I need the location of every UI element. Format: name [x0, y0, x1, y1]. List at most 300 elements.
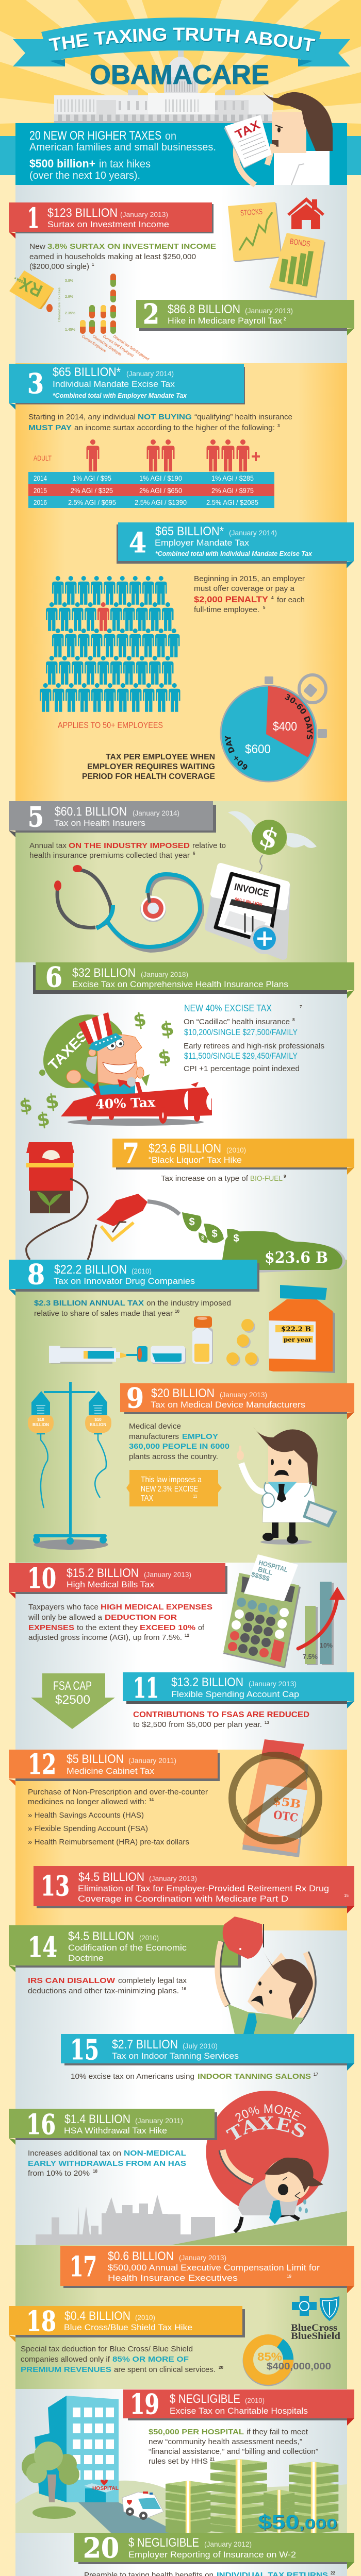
illustration: uncle sam in car: $ [18, 1094, 34, 1117]
chart: pill bar chart: ObamaCare Self-Employed [112, 334, 150, 362]
ribbon: tax 11: $13.2 BILLION [171, 1675, 243, 1689]
ribbon: tax 13: 13 [41, 1870, 70, 1902]
text block: tax 3: MUST PAY [28, 423, 72, 432]
text block: tax 5: relative to [192, 841, 226, 850]
icon: FSA cap arrow: $2500 [55, 1693, 90, 1707]
icon: RX bottle: RX [17, 273, 45, 301]
table: mandate penalties: 2014 [34, 474, 47, 482]
text block: tax 3 [28, 413, 292, 432]
icon: drug bottle: $22.2 B [281, 1326, 311, 1333]
table: mandate penalties: 1% AGI / $95 [73, 474, 111, 482]
text block: tax 7: Tax increase on a type of [161, 1174, 249, 1183]
text block: tax 10: DEDUCTION FOR [105, 1613, 177, 1622]
icon: FSA cap arrow: FSA CAP [53, 1679, 92, 1693]
text block: tax 15: INDOOR TANNING SALONS [198, 2072, 311, 2081]
ribbon: tax 6: Excise Tax on Comprehensive Health Insurance Plans [72, 979, 288, 989]
text block: tax 10: of [198, 1623, 205, 1632]
ribbon: tax 20: $ NEGLIGIBLE [128, 2536, 199, 2550]
illustration: money stacks: ,000 [299, 2516, 337, 2532]
illustration: IV stand [28, 1382, 111, 1550]
icon: drug bottle: per year [284, 1336, 311, 1343]
ribbon: tax 13: $4.5 BILLION [78, 1870, 144, 1884]
illustration: man reading tax form [224, 91, 333, 185]
illustration: uncle sam in car: 40% Tax [95, 1095, 156, 1112]
icon row: adults: ADULT [34, 454, 52, 462]
ribbon: tax 1: $123 BILLION [47, 206, 118, 220]
callout: excise tax [126, 1470, 222, 1506]
icon: flying dollar: $ [255, 820, 283, 856]
callout: excise tax: 11 [193, 1494, 198, 1499]
text block: tax 9: plants across the country. [129, 1452, 218, 1461]
illustration: stethoscope [54, 865, 202, 951]
text block: tax 18: are spent on clinical services. [114, 2365, 216, 2374]
text block: tax 8 [34, 1299, 231, 1318]
illustration: syringe and vials [49, 1316, 259, 1366]
table: mandate penalties: 2015 [34, 487, 47, 495]
text block: tax 10 [28, 1603, 212, 1642]
logo: BlueCross BlueShield: BlueCross [291, 2323, 337, 2333]
text block: tax 15 [71, 2072, 318, 2081]
ribbon: tax 14: 14 [28, 1931, 57, 1963]
ribbon: tax 9: Tax on Medical Device Manufacturers [151, 1400, 305, 1410]
ribbon: tax 15: (July 2010) [183, 2042, 218, 2050]
text block: tax 4 [194, 574, 305, 614]
ribbon: tax 15: Tax on Indoor Tanning Services [112, 2051, 239, 2061]
text block: tax 5: health insurance premiums collected that year [29, 851, 190, 860]
text block: tax 9: Medical device [129, 1422, 181, 1431]
ribbon: tax 18: Blue Cross/Blue Shield Tax Hike [64, 2323, 192, 2332]
ribbon: tax 2 [136, 298, 354, 335]
ribbon: tax 14: $4.5 BILLION [68, 1929, 134, 1943]
ribbon: tax 4: *Combined total with Individual Mandate Excise Tax [155, 550, 313, 557]
table: mandate penalties: 2.5% AGI / $695 [68, 499, 116, 506]
text block: tax 10: adjusted gross income (AGI), up from 7.5%. [28, 1633, 182, 1642]
ribbon: tax 12: 12 [28, 1749, 56, 1781]
text block: tax 3: Starting in 2014, any individual [28, 413, 136, 421]
text block: tax 3: “qualifying” health insurance [194, 413, 292, 421]
text block: tax 7: BIO-FUEL [250, 1174, 283, 1183]
ribbon: tax 4: $65 BILLION* [155, 524, 224, 538]
text block: tax 12: » Flexible Spending Account (FSA) [28, 1824, 148, 1833]
ribbon: tax 2: (January 2013) [245, 307, 293, 315]
text block: tax 1 [29, 242, 216, 271]
ribbon: tax 18: 18 [26, 2306, 56, 2337]
chart: pill bar chart: 3.8% [65, 279, 74, 283]
text block: tax 16: NON-MEDICAL [124, 2149, 186, 2158]
icon: money pile: $ [201, 1235, 204, 1241]
text block: tax 6: On “Cadillac” health insurance [184, 1018, 290, 1026]
icon label: TAX: TAX [233, 118, 262, 142]
ribbon: tax 3: *Combined total with Employer Mandate Tax [53, 392, 187, 399]
ribbon: tax 17: $500,000 Annual Executive Compensation Limit for [108, 2263, 320, 2273]
ribbon: tax 16: (January 2011) [135, 2116, 183, 2125]
ribbon: tax 15: 15 [70, 2034, 99, 2066]
chart: pill bar chart [58, 274, 150, 362]
text block: tax 5 [29, 841, 226, 860]
icon: money pile: $ [211, 1228, 218, 1240]
panel: intro: 20 NEW OR HIGHER TAXES [29, 129, 161, 143]
ribbon: tax 11: 11 [133, 1672, 159, 1704]
text block: tax 1: 3.8% SURTAX ON INVESTMENT INCOME [47, 242, 216, 251]
chart: pill bar chart: 1.45% [65, 328, 76, 332]
text block: tax 9: 360,000 PEOPLE IN 6000 [129, 1442, 229, 1451]
text block: tax 7: 9 [284, 1174, 286, 1179]
text block: tax 8: $2.3 BILLION ANNUAL TAX [34, 1299, 144, 1308]
label: waiting period tax [82, 753, 215, 781]
ribbon: tax 5 [9, 801, 216, 837]
illustration: man pushing ball uphill [222, 2150, 323, 2232]
text block: tax 9: EMPLOY [182, 1432, 218, 1441]
text block: tax 18: PREMIUM REVENUES [21, 2365, 111, 2374]
text block: tax 19 [149, 2428, 318, 2466]
text block: tax 12 [28, 1788, 208, 1846]
icon: crossed-out OTC bottle: OTC [272, 1808, 299, 1825]
illustration: calculator with hospital bill: BILL [257, 1565, 273, 1577]
icon: crossed-out OTC bottle: $5B [272, 1794, 302, 1811]
ribbon: tax 17: 19 [287, 2274, 291, 2279]
icon: invoice tag [209, 867, 286, 956]
ribbon: tax 6 [33, 961, 354, 998]
ribbon: tax 10: High Medical Bills Tax [67, 1580, 155, 1589]
text block: tax 12: 14 [149, 1798, 154, 1802]
icon: money pile: $23.6 B [265, 1249, 328, 1267]
table: mandate penalties: 2% AGI / $975 [211, 487, 254, 495]
ribbon: tax 7 [112, 1138, 354, 1175]
label: waiting period tax: EMPLOYER REQUIRES WAITING [87, 762, 215, 771]
ribbon: tax 6: (January 2018) [141, 970, 188, 978]
text block: tax 11: 13 [265, 1720, 269, 1725]
text block: tax 4: 5 [263, 605, 266, 610]
illustration: uncle sam in car: $ [159, 1016, 175, 1041]
ribbon: tax 2: 2 [143, 298, 159, 330]
chart: 85 percent donut [243, 2336, 331, 2385]
callout: excise tax: NEW 2.3% EXCISE [141, 1485, 198, 1494]
illustration: calculator with hospital bill [223, 1554, 301, 1668]
icon: bonds chart [269, 233, 325, 298]
label: waiting period tax: TAX PER EMPLOYEE WHEN [106, 753, 215, 761]
ribbon: tax 4: (January 2014) [229, 529, 277, 537]
text block: tax 16: 18 [93, 2169, 97, 2174]
text block: tax 8: 10 [175, 1309, 179, 1314]
text block: tax 16: Increases additional tax on [28, 2149, 121, 2158]
ribbon: tax 6: $32 BILLION [72, 966, 136, 980]
text block: tax 3: 3 [277, 423, 280, 428]
chart: pill bar chart: ObamaCare Tax Hike [58, 287, 61, 322]
ribbon: tax 8: Tax on Innovator Drug Companies [54, 1276, 195, 1286]
title line 1: THE TAXING TRUTH ABOUT [48, 28, 316, 53]
text block: tax 16: EARLY WITHDRAWALS FROM AN HAS [28, 2159, 186, 2168]
ribbon: tax 17: 17 [70, 2251, 97, 2283]
chart: stopwatch waiting period: $600 [245, 742, 271, 756]
chart: deduction threshold bars: 7.5% [303, 1653, 318, 1660]
text block: tax 6: $11,500/SINGLE $29,450/FAMILY [184, 1051, 298, 1061]
icon: money pile: $ [233, 1233, 239, 1244]
callout: excise tax: This law imposes a [141, 1476, 202, 1484]
ribbon: tax 12 [9, 1749, 220, 1786]
text block: tax 14: deductions and other tax-minimizing plans. [28, 1987, 179, 1995]
ribbon: tax 3: (January 2014) [126, 369, 174, 378]
text block: tax 3: an income surtax according to the higher of the following: [74, 423, 275, 432]
chart: deduction threshold bars [298, 1582, 345, 1665]
ribbon: tax 4: Employer Mandate Tax [155, 538, 250, 548]
text block: tax 1: 1 [92, 262, 94, 267]
text block: tax 8: on the industry imposed [146, 1299, 231, 1308]
ribbon: tax 15 [61, 2034, 354, 2071]
chart: pill bar chart: ObamaCare Employee [92, 334, 123, 357]
text block: tax 10: EXCEED 10% [140, 1623, 195, 1632]
icon: flying dollar [228, 811, 317, 872]
chart: stopwatch waiting period: 60+ DAYS [225, 736, 248, 770]
ribbon: tax 17: Health Insurance Executives [108, 2273, 238, 2283]
ribbon: tax 18: (2010) [135, 2313, 155, 2321]
ribbon: tax 7: $23.6 BILLION [149, 1142, 221, 1156]
ribbon: tax 12: Medicine Cabinet Tax [67, 1766, 155, 1776]
text block: tax 1: ($200,000 single) [29, 262, 89, 271]
text block: tax 16: from 10% to 20% [28, 2169, 90, 2178]
ribbon: tax 19: (2010) [245, 2396, 265, 2404]
illustration: uncle sam in car [18, 1009, 212, 1131]
illustration: uncle sam in car: $ [44, 1089, 60, 1114]
ribbon: tax 8: (2010) [132, 1267, 152, 1275]
ribbon: tax 5: $60.1 BILLION [55, 805, 127, 819]
illustration: doctor [237, 1427, 337, 1545]
icon: FSA cap arrow [31, 1673, 115, 1729]
illustration: uncle sam in car: TAXES [45, 1027, 91, 1073]
chart: pill bar chart: Current Employee [81, 334, 107, 353]
text block: tax 10: to the extent they [77, 1623, 138, 1632]
logo: BlueCross BlueShield [291, 2296, 340, 2342]
ribbon: tax 1: (January 2013) [120, 210, 168, 218]
ribbon: tax 16: $1.4 BILLION [64, 2112, 130, 2126]
text block: tax 15: 10% excise tax on Americans using [71, 2072, 194, 2081]
ribbon: tax 3 [9, 364, 245, 410]
label: waiting period tax: PERIOD FOR HEALTH COVERAGE [82, 772, 215, 781]
chart: pill bar chart: Current Self-Employed [102, 334, 135, 358]
ribbon: tax 17 [60, 2246, 354, 2293]
text block: tax 11: to $2,500 from $5,000 per plan year. [133, 1720, 262, 1729]
text block: tax 19: rules set by HHS [149, 2457, 208, 2466]
panel: intro: (over the next 10 years). [29, 170, 140, 181]
panel: intro: $500 billion+ [29, 157, 95, 170]
text block: tax 14: completely legal tax [118, 1976, 187, 1985]
text block: tax 20: 22 [331, 2571, 335, 2575]
illustration: skyline and hill [36, 2195, 347, 2245]
text block: tax 12: » Health Reimubrsement (HRA) pre-tax dollars [28, 1838, 189, 1846]
logo: BlueCross BlueShield: BlueShield [291, 2331, 340, 2342]
text block: tax 12: Purchase of Non-Prescription and over-the-counter [28, 1788, 208, 1797]
icon: money pile: $ [189, 1216, 195, 1228]
ribbon: tax 1 [9, 202, 214, 239]
ribbon: tax 14: Codification of the Economic [68, 1943, 187, 1953]
ribbon: tax 7: (2010) [226, 1146, 246, 1154]
illustration: man shaking piggy bank [217, 1917, 314, 2034]
icon grid: 50+ employees [40, 576, 180, 712]
illustration: IV stand: $10 [94, 1417, 102, 1422]
text block: tax 4: 4 [271, 596, 274, 600]
ribbon: tax 13: Coverage in Coordination with Medicare Part D [78, 1894, 288, 1904]
chart: stopwatch waiting period [220, 673, 327, 782]
ribbon: tax 8: 8 [27, 1259, 45, 1291]
illustration: 20% more taxes ball [206, 2091, 329, 2206]
text block: tax 10: Taxpayers who face [28, 1603, 99, 1612]
ribbon: tax 13: Elimination of Tax for Employer-Provided Retirement Rx Drug [78, 1884, 329, 1893]
text block: tax 4: for each [277, 596, 305, 604]
text block: tax 14: 16 [182, 1987, 186, 1991]
label: applies to: APPLIES TO 50+ EMPLOYEES [58, 720, 163, 730]
ribbon: tax 20: (January 2012) [204, 2540, 252, 2548]
text block: tax 15: 17 [314, 2072, 318, 2077]
text block: tax 5: Annual tax [29, 841, 67, 850]
icon: money pile [182, 1212, 346, 1273]
text block: tax 16 [28, 2149, 186, 2178]
icon: stocks chart: STOCKS [240, 207, 263, 217]
chart: 85 percent donut: $400,000,000 [267, 2361, 331, 2371]
ribbon: tax 15: $2.7 BILLION [112, 2038, 178, 2052]
icon: drug bottle [269, 1285, 335, 1373]
ribbon: tax 5: (January 2014) [133, 809, 179, 817]
illustration: IV stand: $10 [37, 1417, 44, 1422]
text block: tax 7 [161, 1174, 286, 1183]
text block: tax 6: $10,200/SINGLE $27,500/FAMILY [184, 1027, 298, 1037]
text block: tax 18: 85% OR MORE OF [112, 2355, 189, 2364]
ribbon: tax 9: $20 BILLION [151, 1386, 215, 1400]
ribbon: tax 17: (January 2013) [179, 2253, 226, 2262]
text block: tax 9 [129, 1422, 229, 1461]
ribbon: tax 3: $65 BILLION* [53, 365, 121, 379]
ribbon: tax 2: Hike in Medicare Payroll Tax [168, 316, 283, 326]
text block: tax 12: medicines no longer allowed with: [28, 1798, 146, 1806]
ribbon: tax 18: $0.4 BILLION [64, 2309, 130, 2323]
text block: tax 4: $2,000 PENALTY [194, 595, 269, 604]
ribbon: tax 5: 5 [28, 801, 44, 833]
panel: intro [15, 91, 347, 185]
table: mandate penalties: 2.5% AGI / $1390 [135, 499, 187, 506]
ribbon: tax 11 [123, 1672, 354, 1708]
ribbon: tax 14 [9, 1925, 241, 1972]
icon: stocks chart [228, 202, 282, 262]
icon: RX bottle: 200K+ [13, 276, 26, 285]
ribbon: tax 19: 19 [130, 2388, 159, 2420]
text block: tax 19: new “community health assessment needs,” [149, 2437, 302, 2446]
illustration: biofuel pump [26, 1142, 179, 1260]
table: mandate penalties: 2% AGI / $650 [139, 487, 182, 495]
chart: pill bar chart: 2.9% [65, 295, 74, 299]
callout: excise tax: TAX [141, 1494, 153, 1503]
illustration: money stacks [166, 2459, 338, 2535]
ribbon: tax 17: $0.6 BILLION [108, 2249, 174, 2263]
ribbon: tax 9 [120, 1382, 354, 1419]
ribbon: tax 4 [117, 522, 354, 568]
text block: tax 4: must offer coverage or pay a [194, 584, 295, 593]
illustration: uncle sam in car: $ [132, 1009, 147, 1032]
text block: tax 10: HIGH MEDICAL EXPENSES [101, 1603, 212, 1612]
illustration: IV stand: BILLION [90, 1422, 106, 1427]
tax 1 section [9, 197, 325, 362]
ribbon: tax 12: $5 BILLION [67, 1752, 124, 1766]
text block: tax 19: 21 [210, 2457, 215, 2462]
illustration: capitol building [54, 50, 273, 123]
icon: invoice tag: INVOICE [233, 882, 270, 900]
table: mandate penalties: 1% AGI / $285 [211, 474, 254, 482]
ribbon: tax 2: 2 [284, 317, 286, 321]
text block: tax 11 [133, 1710, 309, 1729]
ribbon: tax 9: 9 [126, 1382, 144, 1414]
ribbon: tax 8 [9, 1259, 259, 1296]
ribbon: tax 14: Doctrine [68, 1953, 104, 1963]
illustration: 20% more taxes ball: 20% MORE [235, 2104, 301, 2123]
illustration: money stacks: $50 [258, 2512, 299, 2533]
ribbon: tax 3: 3 [27, 368, 44, 400]
text block: tax 19: if they fail to meet [247, 2428, 308, 2436]
ribbon: tax 4: 4 [129, 527, 146, 559]
panel: intro: on [165, 130, 176, 142]
text block: tax 4: full-time employee. [194, 605, 259, 614]
text block: tax 1: New [29, 242, 45, 251]
ribbon: tax 19: $ NEGLIGIBLE [170, 2392, 240, 2406]
text block: tax 18: companies allowed only if [21, 2355, 110, 2364]
table: mandate penalties: 2% AGI / $325 [71, 487, 113, 495]
ribbon: tax 14: (2010) [139, 1934, 159, 1942]
text block: tax 14 [28, 1976, 187, 1995]
text block: tax 11: CONTRIBUTIONS TO FSAS ARE REDUCED [133, 1710, 309, 1719]
text block: tax 10: will only be allowed a [28, 1613, 103, 1622]
ribbon: tax 20: Employer Reporting of Insurance on W-2 [128, 2550, 296, 2560]
ribbon: tax 13: (January 2013) [149, 1874, 197, 1883]
text block: tax 18: 20 [219, 2365, 223, 2370]
chart: 85 percent donut: 85% [257, 2350, 282, 2363]
table: mandate penalties: 2.5% AGI / $2085 [206, 499, 258, 506]
illustration: 20% more taxes ball: TAXES [226, 2116, 306, 2140]
text block: tax 18 [21, 2345, 223, 2374]
ribbon: tax 19 [123, 2388, 354, 2426]
ribbon: tax 3: Individual Mandate Excise Tax [53, 379, 175, 389]
text block: tax 19: “financial assistance,” and “billing and collection” [149, 2447, 318, 2456]
text block: tax 6: NEW 40% EXCISE TAX [184, 1003, 272, 1013]
text block: tax 4: Beginning in 2015, an employer [194, 574, 305, 583]
text block: tax 9: manufacturers [129, 1432, 179, 1441]
ribbon: tax 7: “Black Liquor” Tax Hike [149, 1155, 242, 1165]
table: mandate penalties: 2016 [34, 499, 47, 506]
text block: tax 1: earned in households making at least $250,000 [29, 252, 196, 261]
text block: tax 5: ON THE INDUSTRY IMPOSED [69, 841, 190, 850]
ribbon: tax 12: (January 2011) [128, 1756, 176, 1765]
ribbon: tax 19: Excise Tax on Charitable Hospitals [170, 2406, 308, 2416]
text block: tax 6: 7 [300, 1005, 302, 1009]
ribbon: tax 20: 20 [83, 2532, 119, 2564]
text block: tax 6: 8 [292, 1018, 295, 1022]
text block: tax 6: CPI +1 percentage point indexed [184, 1064, 300, 1073]
text block: tax 5: 6 [193, 851, 195, 856]
icon: house [287, 197, 324, 229]
ribbon: tax 8: $22.2 BILLION [54, 1263, 127, 1277]
title ribbon [13, 18, 350, 66]
text block: tax 20 [84, 2571, 335, 2576]
illustration: IV stand: BILLION [32, 1422, 49, 1427]
ribbon: tax 9: (January 2013) [220, 1391, 267, 1399]
text block: tax 3: NOT BUYING [138, 413, 192, 421]
illustration: calculator with hospital bill: HOSPITAL [258, 1558, 289, 1573]
icon: bonds chart: BONDS [289, 237, 311, 249]
text block: tax 6 [184, 1003, 324, 1073]
text block: tax 19: $50,000 PER HOSPITAL [149, 2428, 244, 2436]
ribbon: tax 6: 6 [45, 961, 62, 993]
ribbon: tax 13: 15 [344, 1893, 349, 1898]
text block: tax 12: » Health Savings Accounts (HAS) [28, 1811, 144, 1820]
icon: RX bottle [9, 270, 54, 312]
ribbon: tax 16 [9, 2109, 217, 2145]
icon: crossed-out OTC bottle [232, 1739, 319, 1857]
chart: stopwatch waiting period: 30-60 DAYS [285, 694, 313, 739]
